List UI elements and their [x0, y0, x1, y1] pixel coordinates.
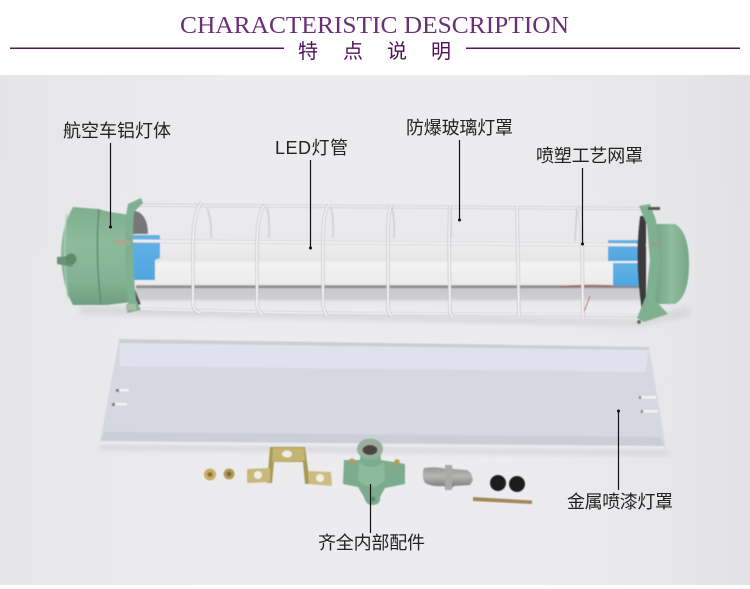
- wire cage hoops: shadow: [193, 202, 583, 318]
- red wire: [560, 285, 612, 287]
- right end cap: [637, 204, 689, 324]
- rubber rings: [490, 475, 525, 492]
- wire cage hooks: [207, 207, 577, 241]
- lamp assembly: [57, 198, 690, 326]
- callout: metal shade: 金属喷漆灯罩: [567, 492, 673, 512]
- heading block: [10, 13, 740, 63]
- wire cage rails: [132, 205, 648, 315]
- lamp shadow: [80, 306, 690, 326]
- reflector body: [100, 339, 666, 449]
- title: Chinese: 特点说明: [298, 40, 451, 63]
- reflector lower lip: [100, 441, 666, 449]
- right rule: [466, 48, 740, 49]
- reflector upper band: [120, 342, 649, 372]
- green junction box: [343, 438, 405, 505]
- callout: aluminium body: 航空车铝灯体: [63, 121, 171, 141]
- left cap lug: [57, 256, 74, 267]
- callout: explosion-proof glass: [406, 118, 513, 222]
- callout: LED tube: LED灯管: [275, 138, 348, 158]
- left blue lamp holder: [130, 235, 160, 280]
- left flange: [125, 198, 143, 313]
- reflector shadow: [100, 445, 670, 455]
- callout: explosion-proof glass: 防爆玻璃灯罩: [406, 118, 513, 138]
- accessories: [204, 438, 532, 505]
- callout: coated wire guard: [536, 146, 643, 246]
- left dark collar: [132, 210, 148, 234]
- reflector slots: [113, 389, 658, 413]
- threaded rod: [473, 497, 532, 504]
- metal bracket: [247, 447, 332, 486]
- callout: aluminium body: [63, 121, 171, 228]
- callout: LED tube: [275, 138, 348, 250]
- reflector lower band: [100, 432, 664, 446]
- right blue lamp holders: [608, 240, 646, 286]
- right flange: [637, 204, 668, 322]
- reflector top edge: [119, 339, 649, 350]
- title: English: CHARACTERISTIC DESCRIPTION: [180, 13, 569, 39]
- callout: coated wire guard: 喷塑工艺网罩: [536, 146, 643, 166]
- reflector shade: [100, 339, 670, 455]
- glass tube: [136, 206, 640, 315]
- callout: accessories: [318, 484, 425, 553]
- left rule: [10, 48, 284, 49]
- callout: metal shade: [567, 410, 673, 512]
- callout: accessories: 齐全内部配件: [318, 533, 425, 553]
- zinc coupling: [423, 465, 473, 490]
- left end cap: [57, 198, 148, 313]
- wire cage hoops: highlight: [193, 202, 583, 318]
- brass nuts: [204, 468, 234, 480]
